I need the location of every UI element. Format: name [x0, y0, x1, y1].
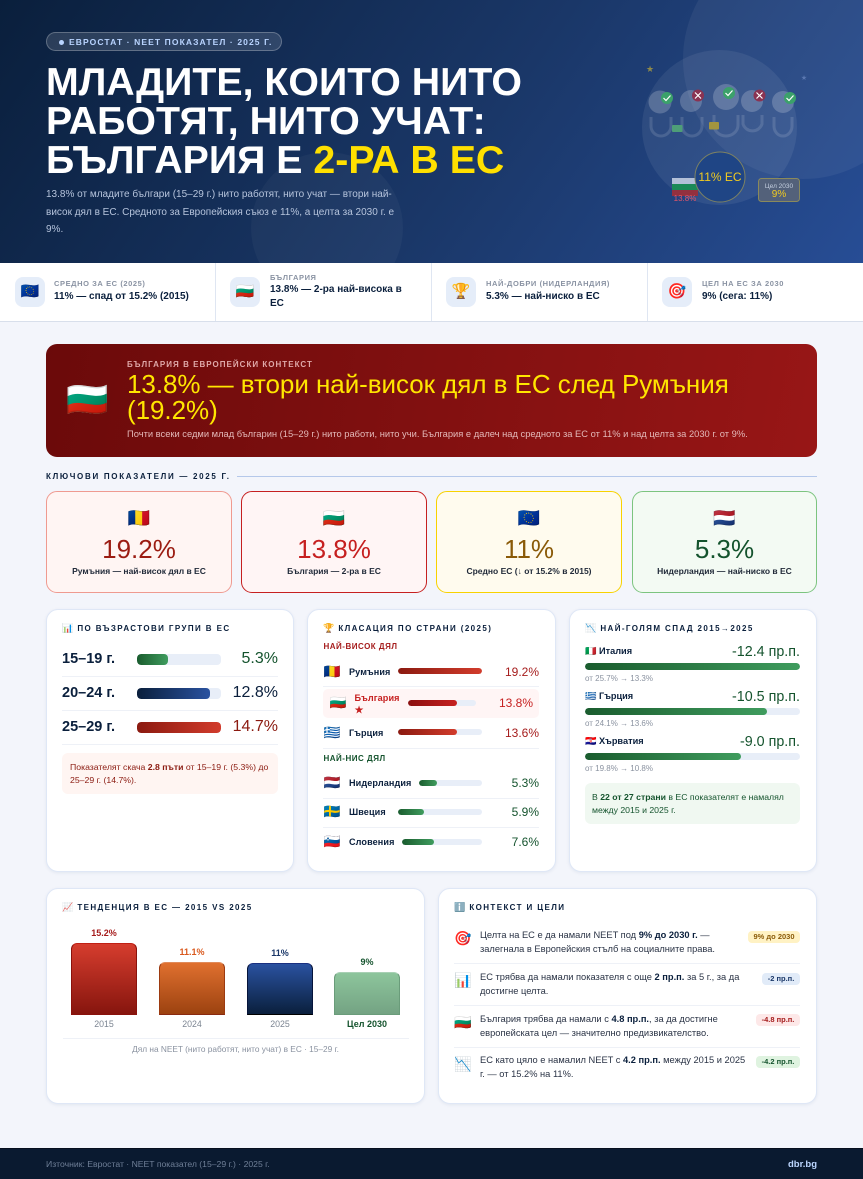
stat dividers: [215, 263, 648, 321]
KPI: Bulgaria: България — 2-ра в ЕС: [287, 566, 381, 576]
title: МЛАДИТЕ, КОИТО НИТО: [46, 60, 522, 104]
EU average circle: [695, 152, 745, 202]
row 15–19: [62, 650, 278, 667]
rank: Romania: [324, 664, 539, 679]
context item: EU reduced: -4.2 пр.п.: [762, 1057, 794, 1066]
bar target 2030: [334, 957, 400, 1029]
rank: Bulgaria highlighted: България ★: [354, 693, 400, 715]
stat: EU target: 9% (сега: 11%): [702, 291, 772, 302]
title: БЪЛГАРИЯ Е 2-РА В ЕС: [46, 138, 504, 182]
decline: Greece: 🇬🇷 Гърция: [585, 691, 633, 701]
rank: Slovenia: 7.6%: [512, 835, 539, 849]
context item: EU reduced: 📉: [454, 1056, 472, 1072]
alert banner: Bulgaria in European context: [46, 344, 817, 457]
KPI: EU average: 🇪🇺: [518, 508, 540, 528]
panel: EU trend: [46, 888, 425, 1104]
rank: Romania: 19.2%: [505, 665, 539, 679]
icon: Bulgarian flag: 🇧🇬: [66, 381, 108, 419]
context item: Bulgaria must cut: България трябва да намали с 4.8 пр.п., за да достигне европейската цел — значително предизвикателство.: [480, 1014, 718, 1038]
KPI: Netherlands: Нидерландия — най-ниско в ЕС: [657, 566, 792, 576]
decline: Greece: [585, 689, 800, 728]
EU average circle: 11% ЕС: [698, 170, 742, 184]
context item: target: 🎯: [454, 930, 472, 946]
2030 target box: [758, 178, 800, 202]
note: В 22 от 27 страни в ЕС показателят е намалял между 2015 и 2025 г.: [592, 792, 784, 815]
context item: EU reduced: ЕС като цяло е намалил NEET с 4.2 пр.п. между 2015 и 2025 г. — от 15.2% на 11%.: [480, 1055, 745, 1078]
decline: Croatia: -9.0 пр.п.: [740, 734, 800, 750]
icon: book and briefcase: [672, 122, 719, 132]
panel: country ranking: [307, 609, 556, 872]
stat: Bulgaria: БЪЛГАРИЯ: [270, 273, 317, 282]
KPI: Romania: 🇷🇴: [128, 508, 150, 528]
icon: stars: ★: [801, 74, 807, 82]
header banner: [0, 0, 863, 263]
header decorative circles: [642, 0, 863, 205]
KPI: Bulgaria: [241, 491, 427, 593]
rank: Slovenia: Словения: [349, 837, 394, 847]
bar target 2030: Цел 2030: [347, 1019, 387, 1029]
stat: EU average: [15, 277, 189, 307]
KPI: EU average: Средно ЕС (↓ от 15.2% в 2015): [466, 566, 592, 576]
decline: Greece: от 24.1% → 13.6%: [585, 719, 653, 728]
rank: Greece: [324, 725, 539, 740]
row 20–24: 20–24 г.: [62, 685, 115, 701]
rank: Sweden: Швеция: [349, 807, 386, 817]
rank: Bulgaria highlighted: [323, 689, 539, 718]
context item: EU must cut: 📊: [454, 972, 472, 988]
decline: Italy: 🇮🇹 Италия: [585, 646, 632, 656]
KPI: Netherlands: [632, 491, 817, 593]
alert headline: 13.8% — втори най-висок дял в ЕС след Румъния (19.2%): [127, 369, 729, 425]
context item: target: 9% до 2030: [753, 932, 795, 941]
group label: highest: НАЙ-ВИСОК ДЯЛ: [324, 642, 397, 651]
KPI: Bulgaria: 13.8%: [297, 534, 371, 564]
row 15–19: 15–19 г.: [62, 651, 115, 667]
panel: context and goals: [438, 888, 817, 1104]
title: РАБОТЯТ, НИТО УЧАТ:: [46, 99, 486, 143]
KPI: Bulgaria: 🇧🇬: [323, 508, 345, 528]
stat: best Netherlands: 🏆: [452, 283, 470, 300]
stat: EU target: 🎯: [668, 283, 686, 300]
note: [585, 783, 800, 824]
stat: Bulgaria: 🇧🇬: [236, 283, 254, 300]
icon: stars: ★: [646, 65, 654, 75]
source line: Източник: Евростат · NEET показател (15–29 г.) · 2025 г.: [46, 1159, 270, 1169]
stat: Bulgaria: [230, 273, 402, 309]
KPI: Romania: 19.2%: [102, 534, 176, 564]
note: [62, 753, 278, 794]
icon: status badges: [661, 87, 796, 104]
group label: lowest: НАЙ-НИС ДЯЛ: [324, 754, 386, 763]
KPI: Netherlands: 5.3%: [695, 534, 754, 564]
bar 2024: 11.1%: [179, 947, 205, 957]
context item: EU must cut: ЕС трябва да намали показателя с още 2 пр.п. за 5 г., за да достигне целта.: [480, 972, 739, 996]
site name: dbr.bg: [788, 1159, 817, 1170]
stat: best Netherlands: НАЙ-ДОБРИ (НИДЕРЛАНДИЯ): [486, 279, 610, 288]
panel: age groups: [46, 609, 294, 872]
2030 target box: Цел 2030: [765, 183, 794, 190]
footer: [0, 1148, 863, 1179]
context item: Bulgaria must cut: 🇧🇬: [454, 1014, 472, 1030]
rank: Bulgaria highlighted: 13.8%: [499, 696, 533, 710]
decline: Croatia: от 19.8% → 10.8%: [585, 764, 653, 773]
stat: Bulgaria: 13.8% — 2-ра най-висока в ЕС: [270, 284, 402, 309]
rank: Netherlands: 🇳🇱: [324, 775, 340, 790]
context item: Bulgaria must cut: -4.8 пр.п.: [762, 1015, 794, 1024]
rank: Sweden: [324, 804, 539, 819]
stat: EU target: ЦЕЛ НА ЕС ЗА 2030: [702, 279, 784, 288]
row 25–29: [62, 718, 278, 735]
bar 2025: 2025: [270, 1019, 290, 1029]
rank: Netherlands: Нидерландия: [349, 778, 411, 788]
section heading: key indicators: КЛЮЧОВИ ПОКАЗАТЕЛИ — 2025 Г.: [46, 472, 231, 481]
row 20–24: [62, 684, 278, 701]
title: [46, 60, 522, 182]
chart caption: Дял на NEET (нито работят, нито учат) в ЕС · 15–29 г.: [132, 1044, 339, 1054]
heading: 📊 ПО ВЪЗРАСТОВИ ГРУПИ В ЕС: [62, 623, 231, 633]
source tag pill: ЕВРОСТАТ · NEET ПОКАЗАТЕЛ · 2025 Г.: [69, 37, 272, 47]
KPI: EU average: [436, 491, 622, 593]
row 25–29: 25–29 г.: [62, 719, 115, 735]
illustration: young people and targets: [646, 65, 807, 203]
row 20–24: 12.8%: [233, 684, 278, 701]
decline: Italy: [585, 644, 800, 683]
alert label: БЪЛГАРИЯ В ЕВРОПЕЙСКИ КОНТЕКСТ: [127, 360, 313, 369]
stats strip: [0, 263, 863, 322]
panel content: biggest decline: [585, 623, 800, 824]
bar 2024: [159, 947, 225, 1029]
decline: Italy: -12.4 пр.п.: [732, 644, 800, 660]
bar target 2030: 9%: [360, 957, 374, 967]
rank: Greece: 🇬🇷: [324, 725, 340, 740]
heading: 📈 ТЕНДЕНЦИЯ В ЕС — 2015 VS 2025: [62, 902, 253, 912]
bar 2024: 2024: [182, 1019, 202, 1029]
rank: Netherlands: [324, 775, 539, 790]
icon: Bulgarian flag 13.8%: 13.8%: [674, 194, 696, 203]
rank: Bulgaria highlighted: 🇧🇬: [330, 695, 346, 710]
stat: best Netherlands: [446, 277, 610, 307]
source tag pill: [46, 32, 282, 51]
rank: Greece: Гърция: [349, 728, 383, 738]
bar 2015: 2015: [94, 1019, 114, 1029]
KPI: Romania: Румъния — най-висок дял в ЕС: [72, 566, 206, 576]
rank: Netherlands: 5.3%: [512, 776, 539, 790]
panel content: age groups: [62, 623, 278, 794]
decline: Italy: от 25.7% → 13.3%: [585, 674, 653, 683]
context item: EU must cut: -2 пр.п.: [768, 974, 794, 983]
rank: Greece: 13.6%: [505, 726, 539, 740]
rank: Slovenia: 🇸🇮: [324, 834, 340, 849]
stat: EU average: 11% — спад от 15.2% (2015): [54, 291, 189, 302]
heading: 🏆 КЛАСАЦИЯ ПО СТРАНИ (2025): [323, 623, 492, 633]
stat: EU target: [662, 277, 784, 307]
panel content: country ranking: [323, 623, 539, 849]
row 15–19: 5.3%: [242, 650, 278, 667]
bar 2015: [71, 928, 137, 1029]
rank: Sweden: 5.9%: [512, 805, 539, 819]
heading: 📉 НАЙ-ГОЛЯМ СПАД 2015→2025: [585, 623, 754, 633]
subtitle: 13.8% от младите българи (15–29 г.) нито работят, нито учат — втори най-висок дял в ЕС. Средното за Европейския съюз е 11%, а целта за 2030 г. е 9%.: [46, 189, 394, 235]
stat: best Netherlands: 5.3% — най-ниско в ЕС: [486, 291, 600, 302]
decline: Greece: -10.5 пр.п.: [732, 689, 800, 705]
icon: Bulgarian flag 13.8%: [672, 178, 698, 203]
stat: EU average: СРЕДНО ЗА ЕС (2025): [54, 279, 146, 288]
rank: Slovenia: [324, 834, 539, 849]
row 25–29: 14.7%: [233, 718, 278, 735]
context item: target: Целта на ЕС е да намали NEET под 9% до 2030 г. — залегнала в Европейския стълб на социалните права.: [480, 930, 715, 954]
KPI: Romania: [46, 491, 232, 593]
icon: stars: [646, 65, 807, 82]
bar 2025: 11%: [271, 948, 289, 958]
decline: Croatia: 🇭🇷 Хърватия: [585, 736, 644, 746]
rank: Romania: 🇷🇴: [324, 664, 340, 679]
heading: ℹ️ КОНТЕКСТ И ЦЕЛИ: [454, 902, 565, 912]
stat: EU average: 🇪🇺: [21, 283, 39, 300]
icon: five people: [648, 84, 794, 136]
rank: Sweden: 🇸🇪: [324, 804, 340, 819]
bar 2025: [247, 948, 313, 1029]
2030 target box: 9%: [772, 189, 786, 200]
note: Показателят скача 2.8 пъти от 15–19 г. (5.3%) до 25–29 г. (14.7%).: [70, 762, 268, 785]
panel content: EU trend bar chart: [62, 902, 409, 1054]
rank: Romania: Румъния: [349, 667, 390, 677]
panel: biggest decline: [569, 609, 817, 872]
KPI: Netherlands: 🇳🇱: [713, 508, 736, 528]
bar 2015: 15.2%: [91, 928, 117, 938]
alert description: Почти всеки седми млад българин (15–29 г.) нито работи, нито учи. България е далеч над средното за ЕС от 11% и над целта за 2030 г. от 9%.: [127, 429, 748, 439]
decline: Croatia: [585, 734, 800, 773]
KPI: EU average: 11%: [504, 534, 554, 564]
